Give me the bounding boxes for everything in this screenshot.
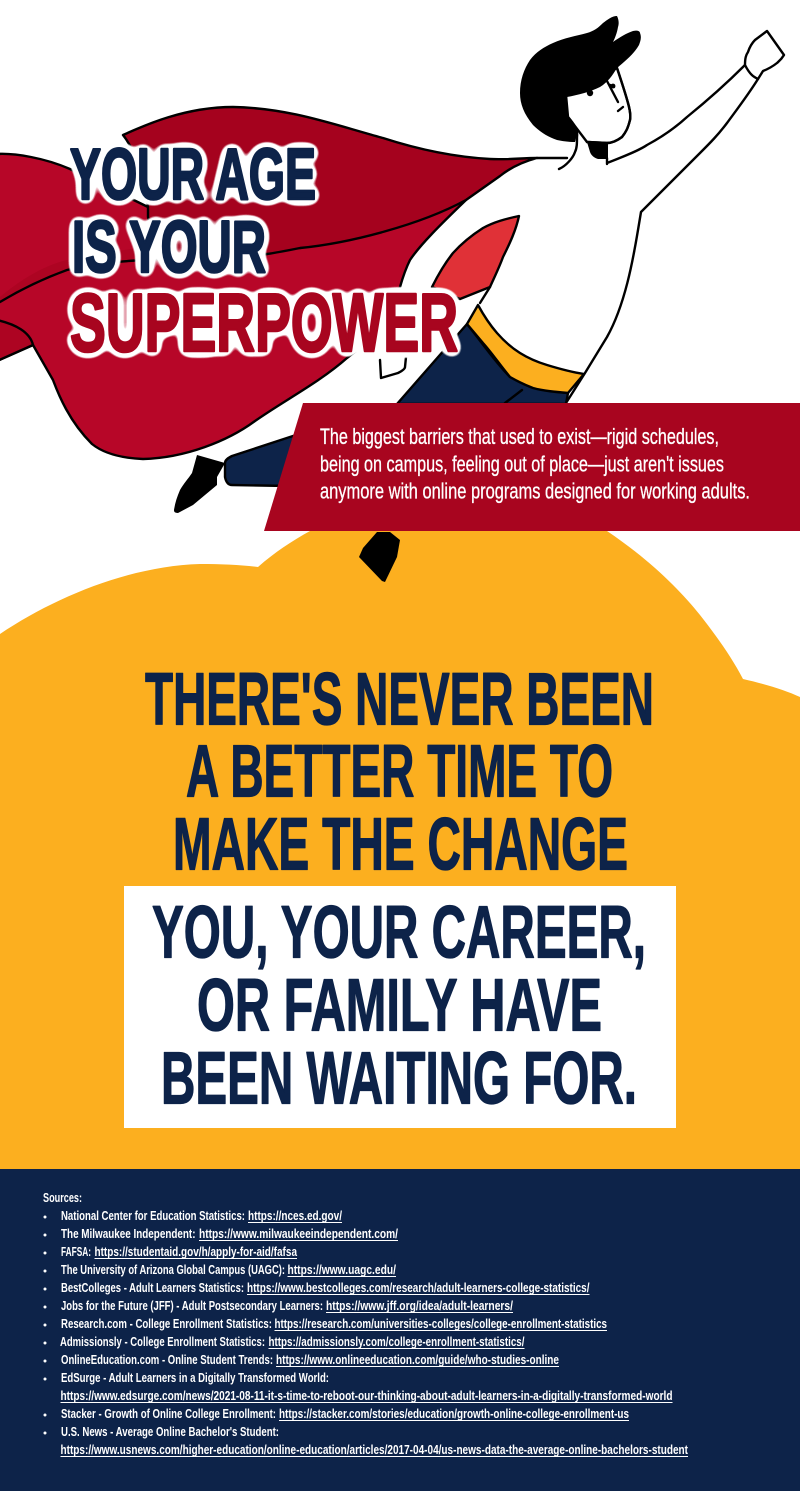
icon: hair xyxy=(520,16,641,142)
source list: The University of Arizona Global Campus (UAGC): xyxy=(61,1262,285,1277)
icon: eye xyxy=(587,90,593,96)
trailing leg xyxy=(225,435,296,486)
superhero illustration xyxy=(0,16,784,582)
source list: OnlineEducation.com - Online Student Trends: xyxy=(61,1352,273,1367)
cape lower left fold xyxy=(0,320,33,361)
cape dark upper xyxy=(123,107,537,259)
callout text: OR FAMILY HAVE xyxy=(197,963,602,1046)
icon: raised fist xyxy=(745,31,784,79)
source list: https://www.jff.org/idea/adult-learners/ xyxy=(326,1298,513,1313)
source list: https://www.onlineeducation.com/guide/who-studies-online xyxy=(276,1352,559,1367)
source list: https://nces.ed.gov/ xyxy=(248,1208,342,1223)
cape dark fold left xyxy=(0,245,157,302)
title line 2: IS YOUR xyxy=(72,207,266,288)
banner text xyxy=(320,424,750,504)
pants xyxy=(397,324,568,404)
nostril dot xyxy=(611,84,615,88)
source list: BestColleges - Adult Learners Statistics: xyxy=(61,1280,244,1295)
title line 1: YOUR AGE xyxy=(70,135,316,215)
source list: https://www.bestcolleges.com/research/adult-learners-college-statistics/ xyxy=(247,1280,590,1295)
white callout box xyxy=(124,886,676,1128)
title xyxy=(70,135,458,369)
source list: FAFSA: xyxy=(61,1244,91,1259)
source list: https://studentaid.gov/h/apply-for-aid/fafsa xyxy=(94,1244,298,1259)
nose and mouth xyxy=(607,81,623,111)
red sleeve xyxy=(432,216,519,299)
source list xyxy=(44,1208,689,1457)
neck xyxy=(559,117,577,169)
source list: The Milwaukee Independent: xyxy=(61,1226,196,1241)
source list: Stacker - Growth of Online College Enrollment: xyxy=(61,1406,276,1421)
cape main xyxy=(0,154,466,459)
icon: lower shoe xyxy=(359,532,400,582)
cape fold line xyxy=(0,254,267,302)
source list: U.S. News - Average Online Bachelor's Student: xyxy=(61,1424,279,1439)
source list: https://admissionsly.com/college-enrollment-statistics/ xyxy=(268,1334,525,1349)
icon: trailing shoe xyxy=(174,455,225,513)
face outline xyxy=(587,68,630,143)
hand at hip xyxy=(380,357,406,378)
torso and arm outline xyxy=(537,65,758,403)
headline xyxy=(145,657,654,885)
source list: https://stacker.com/stories/education/growth-online-college-enrollment-us xyxy=(279,1406,629,1421)
red banner xyxy=(264,403,800,531)
source list: Admissionsly - College Enrollment Statistics: xyxy=(60,1334,265,1349)
icon: goatee xyxy=(587,142,608,159)
source list: Research.com - College Enrollment Statistics: xyxy=(61,1316,272,1331)
source list: Jobs for the Future (JFF) - Adult Postsecondary Learners: xyxy=(61,1298,323,1313)
source list: National Center for Education Statistics: xyxy=(61,1208,245,1223)
sources heading: Sources: xyxy=(43,1190,82,1205)
title line 3: SUPERPOWER xyxy=(70,276,458,369)
face xyxy=(566,68,630,143)
source list: https://research.com/universities-colleges/college-enrollment-statistics xyxy=(274,1316,607,1331)
pants seam xyxy=(505,390,522,403)
sleeve fold xyxy=(480,287,490,303)
yellow belt xyxy=(467,305,584,393)
callout text xyxy=(152,891,646,1119)
source list: https://www.uagc.edu/ xyxy=(288,1262,396,1277)
sources panel xyxy=(0,1169,800,1491)
source list: EdSurge - Adult Learners in a Digitally Transformed World: xyxy=(61,1370,329,1385)
source list: https://www.milwaukeeindependent.com/ xyxy=(199,1226,398,1241)
yellow cloud background xyxy=(0,531,800,1169)
